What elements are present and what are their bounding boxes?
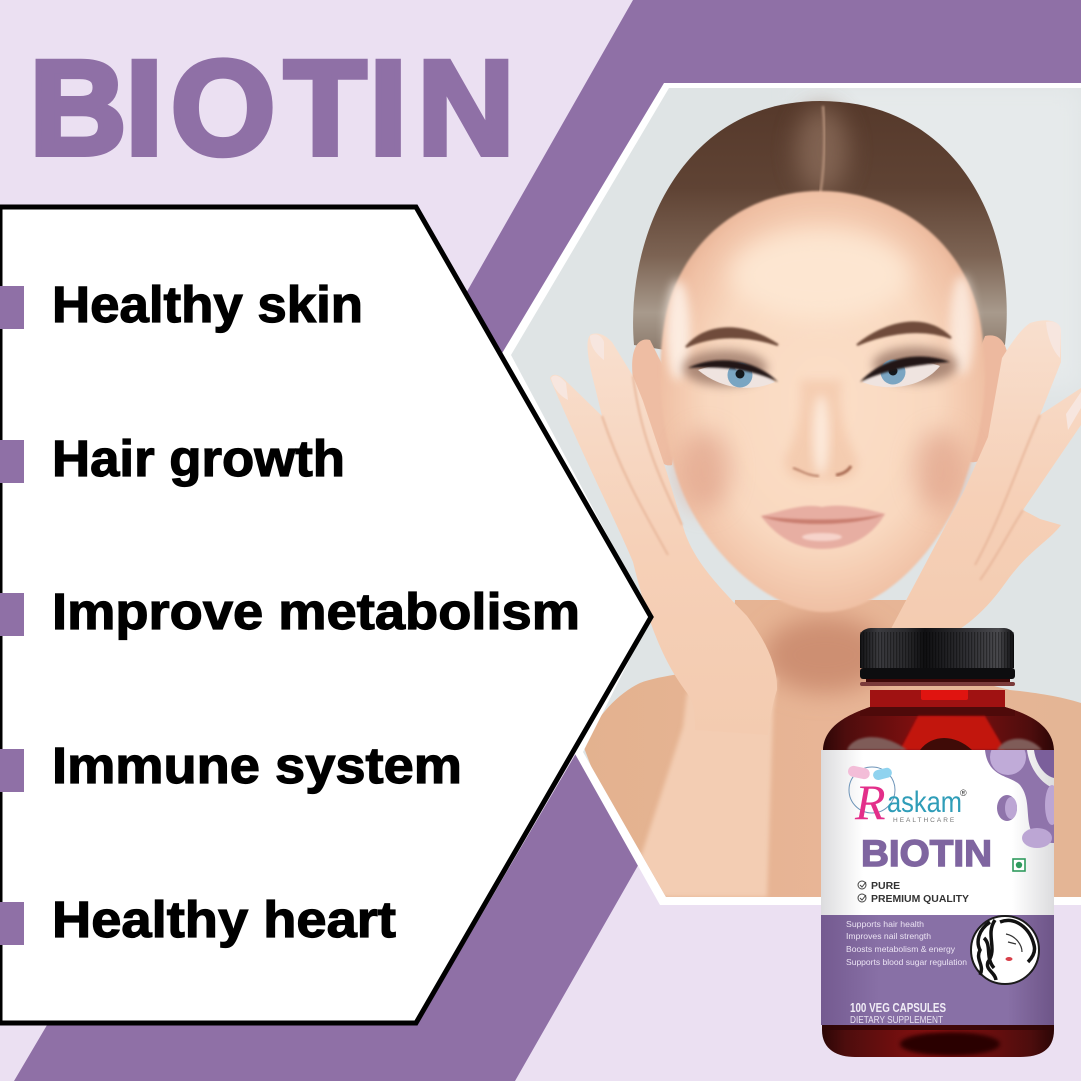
bottom purple band <box>14 750 640 1081</box>
premium quality check: PREMIUM QUALITY <box>871 893 969 905</box>
benefit lines: Boosts metabolism & energy <box>846 944 956 954</box>
benefit: improve metabolism: Improve metabolism <box>52 583 580 640</box>
bottle label top <box>821 739 1059 915</box>
logo wordmark <box>854 774 967 830</box>
right finger lines <box>975 415 1040 580</box>
left forearm <box>625 677 777 897</box>
nose <box>785 380 857 480</box>
cheek shading <box>679 430 731 510</box>
glass body <box>822 690 1054 1057</box>
cheek shading right <box>914 430 966 510</box>
bottle label bottom <box>821 915 1054 1026</box>
benefit lines: Improves nail strength <box>846 931 931 941</box>
lips <box>761 506 885 549</box>
right temple highlight <box>950 275 974 375</box>
logo wordmark: askam <box>887 786 962 819</box>
capsule count: 100 VEG CAPSULES <box>850 1000 946 1015</box>
face <box>660 191 985 612</box>
logo wordmark: ® <box>960 788 967 798</box>
left temple highlight <box>666 280 690 380</box>
cap <box>860 628 1015 686</box>
dietary supplement: DIETARY SUPPLEMENT <box>850 1015 943 1026</box>
benefit: healthy heart: Healthy heart <box>52 891 396 948</box>
glass highlights <box>820 682 1060 1056</box>
benefit lines: Supports hair health <box>846 919 924 929</box>
left brow <box>686 328 778 347</box>
right eye <box>860 347 957 387</box>
hair sheen <box>796 106 848 194</box>
label blobs <box>985 750 1054 848</box>
benefit: hair growth: Hair growth <box>52 430 345 487</box>
top purple band <box>465 0 1081 360</box>
veg mark <box>1013 859 1025 871</box>
forehead highlight <box>730 230 910 320</box>
label product name: BIOTIN <box>861 833 992 874</box>
right hand <box>885 320 1081 645</box>
hair parting highlight <box>820 106 824 196</box>
photo panel: woman <box>500 83 1081 905</box>
benefit lines <box>846 919 967 967</box>
logo wordmark: R <box>854 774 886 830</box>
right ear <box>970 335 1006 462</box>
left nails <box>551 334 604 400</box>
left eye <box>683 350 778 388</box>
logo wordmark: HEALTHCARE <box>893 817 956 824</box>
pure check: PURE <box>871 880 900 892</box>
shoulders and chest <box>583 600 1081 900</box>
pure check <box>858 880 900 892</box>
right brow <box>857 323 951 345</box>
supplement bottle <box>820 628 1060 1057</box>
right nails <box>1046 321 1081 430</box>
woman illustration <box>971 916 1039 984</box>
hair <box>633 101 1007 350</box>
left ear <box>632 340 672 466</box>
left finger lines <box>602 376 682 555</box>
benefit: immune system: Immune system <box>52 737 462 794</box>
white benefits panel <box>0 207 651 1023</box>
benefit lines: Supports blood sugar regulation <box>846 957 967 967</box>
title: BIOTIN <box>30 34 514 183</box>
logo capsules <box>847 765 895 813</box>
neck shadow <box>763 617 887 693</box>
benefit: healthy skin: Healthy skin <box>52 276 363 333</box>
left hand <box>550 333 777 735</box>
